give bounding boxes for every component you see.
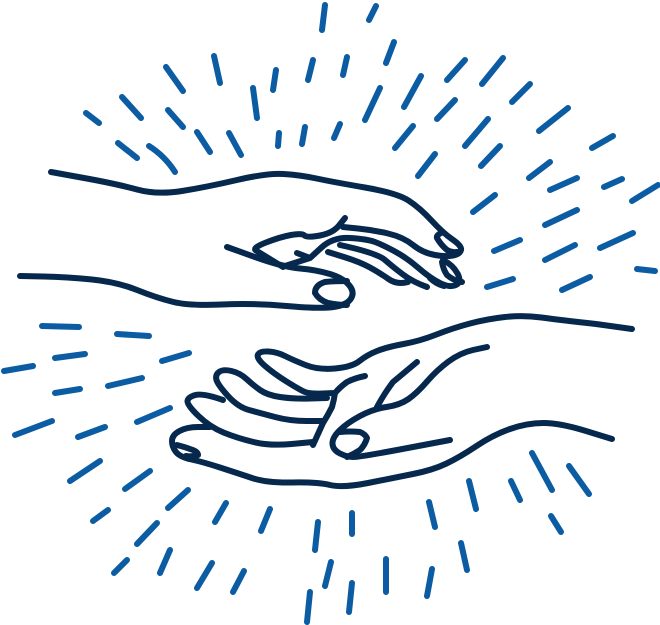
first finger and lower hand: [172, 423, 612, 486]
fingertip nail: [177, 445, 198, 456]
thumb nail: [340, 432, 367, 457]
thumb nail: [315, 281, 347, 305]
third finger: [187, 395, 313, 445]
little finger: [328, 252, 408, 283]
thumb crease: [377, 362, 417, 407]
finger outline: [255, 218, 345, 267]
palm edge: [313, 376, 365, 445]
top hand: [20, 172, 462, 308]
middle finger: [285, 238, 459, 286]
back of hand and index finger: [51, 172, 461, 256]
finger nails: [430, 232, 462, 286]
thumb and lower wrist: [20, 247, 353, 308]
thumb: [332, 347, 487, 457]
wrist to top finger: [258, 316, 632, 394]
second finger: [216, 370, 327, 421]
ring finger: [340, 245, 427, 287]
bottom hand: [172, 316, 632, 486]
